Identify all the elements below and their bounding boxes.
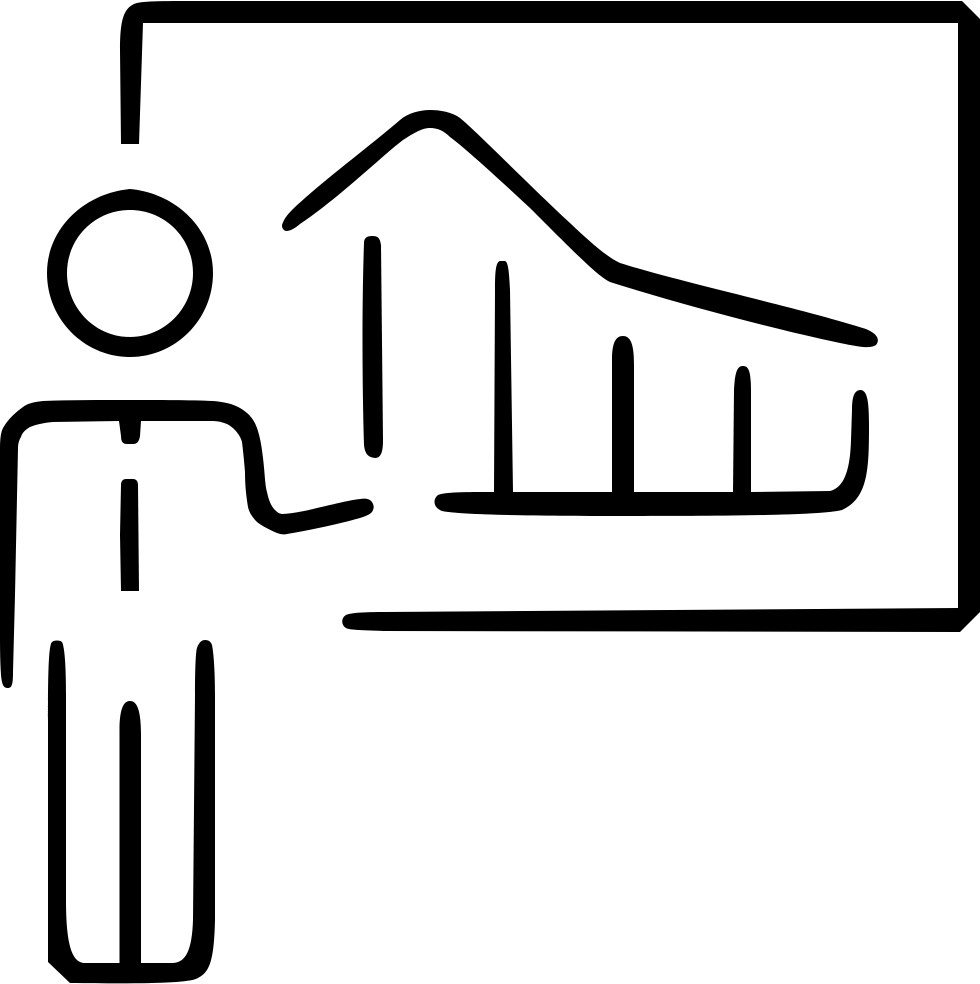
buttons line xyxy=(120,479,139,591)
bars and baseline group xyxy=(435,261,869,516)
chart bars and baseline xyxy=(362,236,869,516)
legs xyxy=(48,640,215,983)
torso and pointing arm xyxy=(0,400,374,688)
presenter head xyxy=(47,189,213,357)
presenter body xyxy=(0,400,374,983)
bar 1 xyxy=(362,236,383,458)
board frame xyxy=(120,1,980,632)
chart trend line xyxy=(282,110,878,347)
